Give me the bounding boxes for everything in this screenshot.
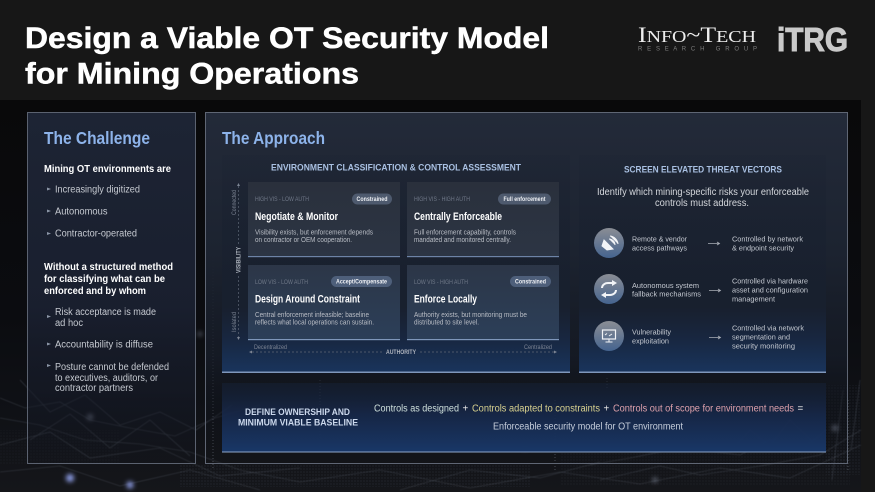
equation: = — [798, 404, 804, 414]
equation — [374, 404, 804, 432]
heading: The Challenge: The Challenge — [44, 128, 150, 148]
arrow — [708, 242, 720, 245]
row: autonomous system fallback — [594, 274, 808, 304]
logo: ITRG: iTRG — [777, 21, 848, 58]
card: enforce locally: Authority exists, but monitoring must be — [414, 312, 527, 319]
card: design around constraint: reflects what local operations can sustain. — [255, 319, 374, 326]
row: vulnerability exploitation: exploitation — [632, 336, 669, 346]
card: negotiate and monitor: Visibility exists, but enforcement depends — [255, 230, 373, 236]
logo: Info-Tech Research Group: INFO ~T ECH — [638, 22, 756, 47]
list: consequences — [47, 307, 169, 394]
axis: authority: Decentralized — [254, 345, 287, 351]
heading: The Approach: The Approach — [222, 128, 325, 148]
equation: + — [462, 404, 468, 414]
row: autonomous system fallback: Controlled via hardware — [732, 276, 808, 286]
list: environment traits — [47, 184, 140, 240]
icon: satellite dish — [594, 228, 624, 258]
card: centrally enforceable: Full enforcement — [504, 197, 546, 203]
text: without a structured method: for classifying what can be — [44, 274, 165, 285]
equation: + — [604, 404, 610, 414]
card: design around constraint: Design Around Constraint — [255, 294, 360, 306]
heading: define ownership — [238, 407, 358, 428]
axis: visibility — [232, 183, 242, 340]
title: for Mining Operations — [25, 58, 359, 90]
card: negotiate and monitor: on contractor or OEM cooperation. — [255, 237, 352, 244]
card: negotiate and monitor: Negotiate & Monitor — [255, 211, 339, 223]
panel: threat vectors — [579, 155, 826, 373]
row: remote and vendor access: & endpoint security — [732, 244, 794, 252]
heading: threat vectors: SCREEN ELEVATED THREAT VECTORS — [624, 164, 782, 174]
card: enforce locally: LOW VIS - HIGH AUTH — [414, 280, 468, 286]
card: design around constraint: LOW VIS - LOW AUTH — [255, 280, 308, 286]
text: threat vector intro: Identify which mining-specific risks your enforceable — [597, 187, 810, 198]
row: vulnerability exploitation: security monitoring — [732, 342, 795, 350]
card: negotiate and monitor — [248, 182, 400, 257]
panel: environment classification — [222, 155, 570, 373]
card: design around constraint: Central enforcement infeasible; baseline — [255, 312, 369, 319]
row: vulnerability exploitation: segmentation and — [732, 332, 790, 342]
equation: Controls adapted to constraints — [472, 404, 600, 414]
row: autonomous system fallback: asset and configuration — [732, 286, 808, 294]
panel: The Challenge — [28, 112, 196, 464]
text: without a structured method: enforced and by whom — [44, 286, 146, 297]
row: remote and vendor access: Remote & vendor — [632, 234, 687, 244]
text: threat vector intro: controls must address. — [655, 198, 749, 209]
row: autonomous system fallback: fallback mechanisms — [632, 290, 701, 298]
axis: visibility: Connected — [232, 190, 238, 215]
card: enforce locally: distributed to site level. — [414, 319, 479, 326]
axis: authority: Centralized — [524, 345, 552, 351]
card: centrally enforceable: Full enforcement capability, controls — [414, 230, 516, 236]
card: design around constraint: Accept/Compensate — [336, 280, 388, 286]
heading: define ownership: DEFINE OWNERSHIP AND — [245, 407, 350, 417]
text: threat vector intro — [597, 187, 810, 209]
list: environment traits: Increasingly digitized — [55, 184, 140, 196]
card: design around constraint — [248, 265, 400, 340]
equation: Controls out of scope for environment needs — [613, 404, 794, 414]
row: remote and vendor access: Controlled by network — [732, 234, 803, 244]
axis: visibility: Isolated — [232, 312, 238, 332]
list: consequences: Accountability is diffuse — [55, 340, 154, 350]
list: consequences: Risk acceptance is made — [55, 307, 157, 318]
text: without a structured method: Without a structured method — [44, 262, 173, 273]
row: remote and vendor access: access pathways — [632, 244, 687, 252]
row: vulnerability exploitation: Vulnerability — [632, 328, 671, 336]
list: consequences: to executives, auditors, or — [55, 373, 159, 384]
list: consequences: Posture cannot be defended — [55, 362, 169, 373]
icon: cycle arrows — [594, 274, 624, 304]
row: autonomous system fallback: Autonomous system — [632, 281, 699, 290]
list: consequences: ad hoc — [55, 318, 83, 329]
card: negotiate and monitor: HIGH VIS - LOW AUTH — [255, 197, 309, 203]
icon: monitor — [594, 321, 624, 351]
card: negotiate and monitor: Constrained — [356, 197, 388, 203]
equation: Enforceable security model for OT environment — [493, 422, 683, 432]
card: centrally enforceable: mandated and monitored centrally. — [414, 237, 511, 244]
title: Design a Viable OT Security Model — [25, 22, 549, 55]
list: consequences: contractor partners — [55, 383, 133, 394]
axis: authority — [249, 345, 557, 356]
text: without a structured method — [44, 262, 173, 297]
card: enforce locally: Enforce Locally — [414, 294, 477, 306]
row: vulnerability exploitation — [594, 321, 804, 351]
arrow — [709, 336, 720, 339]
title — [25, 22, 549, 90]
axis: authority: AUTHORITY — [386, 350, 416, 356]
heading: define ownership: MINIMUM VIABLE BASELINE — [238, 418, 358, 428]
row: vulnerability exploitation: Controlled via network — [732, 324, 804, 332]
card: centrally enforceable: Centrally Enforceable — [414, 211, 502, 223]
equation: Controls as designed — [374, 404, 459, 414]
card: enforce locally: Constrained — [515, 280, 546, 286]
card: centrally enforceable: HIGH VIS - HIGH AUTH — [414, 197, 470, 203]
axis: visibility: VISIBILITY — [236, 247, 242, 273]
logo: Info-Tech Research Group: R E S E A R C H G R O U P — [638, 46, 757, 52]
arrow — [709, 289, 720, 292]
card: centrally enforceable — [407, 182, 559, 257]
list: environment traits: Autonomous — [55, 206, 108, 218]
heading: environment classification: ENVIRONMENT CLASSIFICATION & CONTROL ASSESSMENT — [271, 162, 521, 172]
panel: ownership and baseline — [222, 383, 826, 452]
list: environment traits: Contractor-operated — [55, 228, 137, 240]
row: remote and vendor access — [594, 228, 803, 258]
card: enforce locally — [407, 265, 559, 340]
row: autonomous system fallback: management — [732, 294, 776, 304]
panel: The Approach — [206, 112, 848, 464]
text: mining OT environments: Mining OT environments are — [44, 164, 171, 175]
